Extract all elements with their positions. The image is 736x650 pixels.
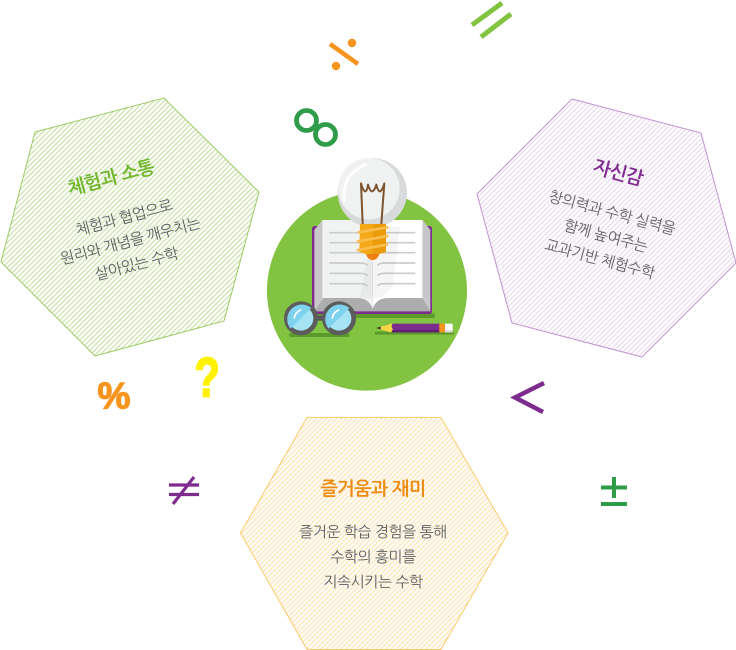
text block: orange panel description [299,524,447,591]
text block: purple panel description: 창의력과 수학 실력을 [547,188,677,238]
text block: green panel description [52,191,209,291]
icon: division sign [330,39,358,70]
icon: question mark: ? [194,346,220,409]
panel: 자신감 [477,99,736,357]
icon: open book [312,220,435,318]
text block: orange panel description: 지속시키는 수학 [323,574,424,591]
green circle [267,191,467,391]
text block: orange panel description: 수학의 흥미를 [330,549,416,566]
text block: orange panel description: 즐거운 학습 경험을 통해 [299,524,447,541]
icon: plus minus [601,477,627,504]
central illustration [267,158,467,391]
text block: green panel description: 원리와 개념을 깨우치는 [59,215,202,268]
text block: purple panel description [534,188,677,285]
icon: pencil [375,323,454,335]
heading: 자신감: 자신감 [591,156,646,189]
icon: glasses [286,304,354,337]
heading: 즐거움과 재미: 즐거움과 재미 [320,478,426,499]
icon: less than [515,383,544,412]
icon: percent: % [98,376,130,416]
panel: 즐거움과 재미 [240,418,508,650]
icon: infinity [296,110,336,144]
icon: equals sign [472,3,511,37]
heading: 체험과 소통: 체험과 소통 [65,156,157,199]
text block: purple panel description: 교과기반 체험수학 [543,237,657,283]
panel: 체험과 소통 [1,98,259,356]
icon: not equal [169,477,199,504]
text block: purple panel description: 함께 높여주는 [562,217,649,256]
icon: light bulb [338,158,407,299]
text block: green panel description: 체험과 협업으로 [74,197,175,239]
text block: green panel description: 살아있는 수학 [93,245,181,284]
